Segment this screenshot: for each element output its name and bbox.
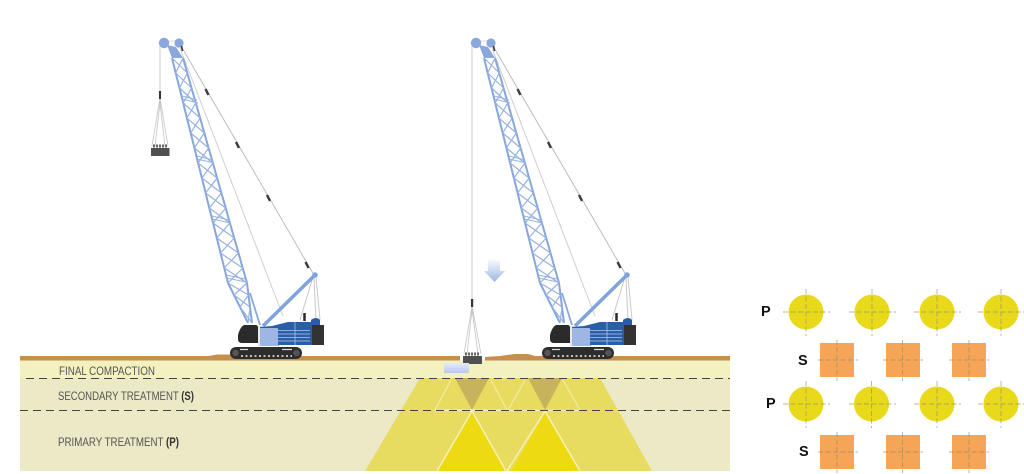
- crane 2 body and boom: [471, 38, 636, 359]
- final compaction triangle right: [528, 378, 562, 410]
- soil: primary treatment layer: [20, 410, 730, 471]
- row label S: S: [799, 444, 809, 460]
- compacted trapezoid: [365, 378, 652, 471]
- crane 1 body and boom: [159, 38, 324, 359]
- final compaction triangle left: [455, 378, 489, 410]
- row label S: S: [798, 353, 808, 369]
- crane 2 with dropped weight: [463, 38, 636, 364]
- primary points row 1: [788, 294, 1018, 330]
- secondary points row 1: [820, 343, 986, 377]
- soil: secondary treatment layer: [20, 378, 730, 410]
- phase separator lines: [435, 410, 582, 471]
- dashed layer boundaries: [20, 378, 730, 410]
- crane 2 hoist and pounder: [463, 46, 482, 364]
- crane 1 hoist and pounder: [151, 46, 170, 156]
- arrow: drop direction: [484, 258, 505, 282]
- secondary treatment triangles: [435, 380, 580, 410]
- row label P: P: [761, 304, 771, 320]
- primary triangle left: [438, 413, 505, 471]
- ground surface: [20, 354, 730, 360]
- grid plan of treatment points: [761, 289, 1024, 473]
- impact zone: [365, 378, 652, 471]
- secondary points row 2: [820, 435, 986, 469]
- soil: final compaction layer: [20, 360, 730, 378]
- primary triangle right: [511, 413, 579, 471]
- label: secondary treatment: SECONDARY TREATMENT (S): [58, 391, 194, 403]
- crane 1 with raised weight: [151, 38, 324, 359]
- ground cross-section: [20, 354, 730, 471]
- label: primary treatment: PRIMARY TREATMENT (P): [58, 437, 179, 449]
- primary points row 2: [788, 386, 1018, 422]
- label: final compaction: FINAL COMPACTION: [59, 366, 155, 378]
- row label P: P: [766, 396, 776, 412]
- pale impact print: [444, 363, 469, 373]
